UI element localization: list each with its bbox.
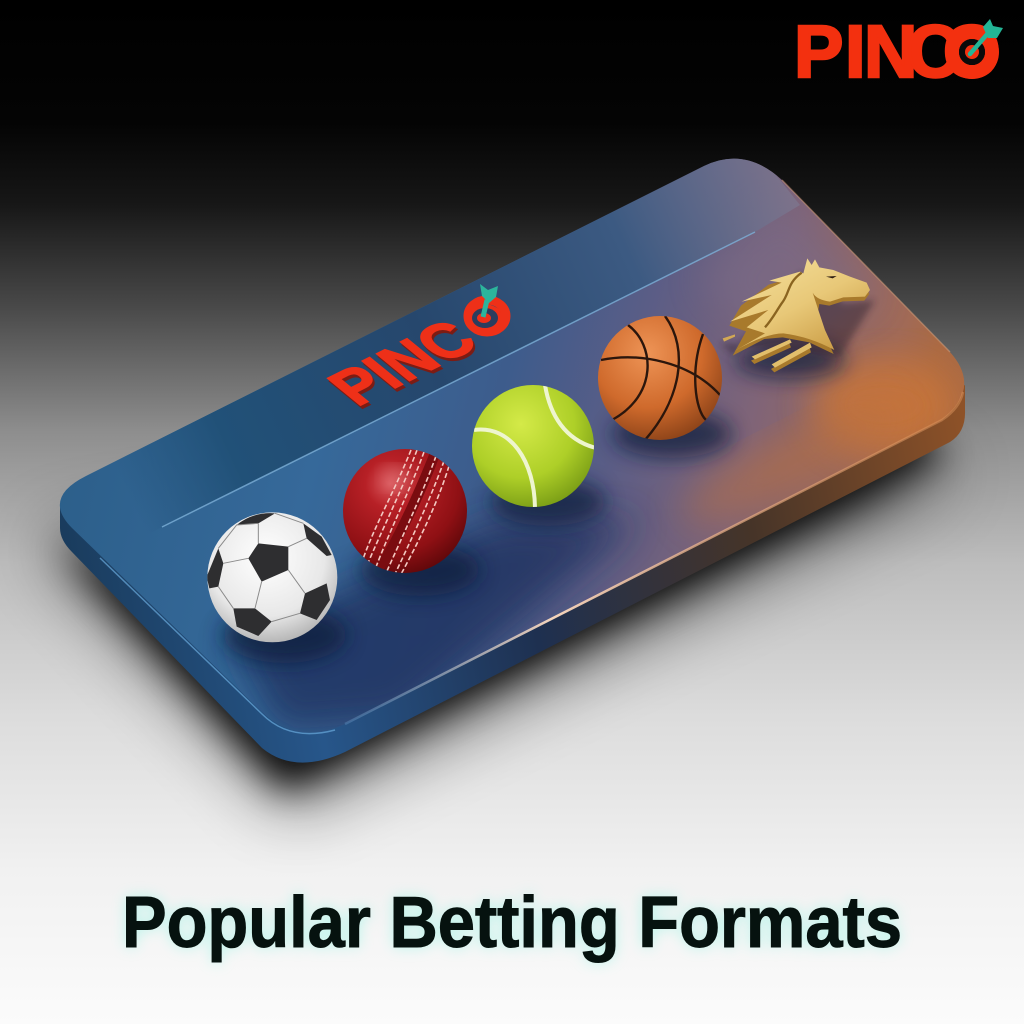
- board shadow: [40, 400, 960, 810]
- title: Popular Betting Formats: [122, 883, 902, 963]
- icon: basketball: [598, 316, 722, 440]
- logo: on board: PINC: [316, 313, 493, 418]
- icon: cricket ball: [343, 449, 467, 578]
- icon: soccer ball: [207, 512, 337, 642]
- logo: on board: O: [455, 298, 523, 344]
- logo: on board: O: [453, 295, 521, 341]
- logo: on board: [314, 284, 533, 418]
- betting board: [40, 130, 965, 763]
- board side: [60, 385, 965, 763]
- icon: tennis ball: [472, 385, 596, 510]
- board bright edge: [345, 392, 963, 724]
- board top surface: [60, 159, 964, 733]
- upper band: [139, 158, 800, 518]
- icon: golden horse head: [720, 258, 875, 372]
- logo: on board: PINC: [314, 310, 491, 415]
- logo: top right: PINCO: [794, 10, 1001, 93]
- title glow: Popular Betting Formats: [122, 883, 902, 963]
- ball shadows: [223, 342, 845, 663]
